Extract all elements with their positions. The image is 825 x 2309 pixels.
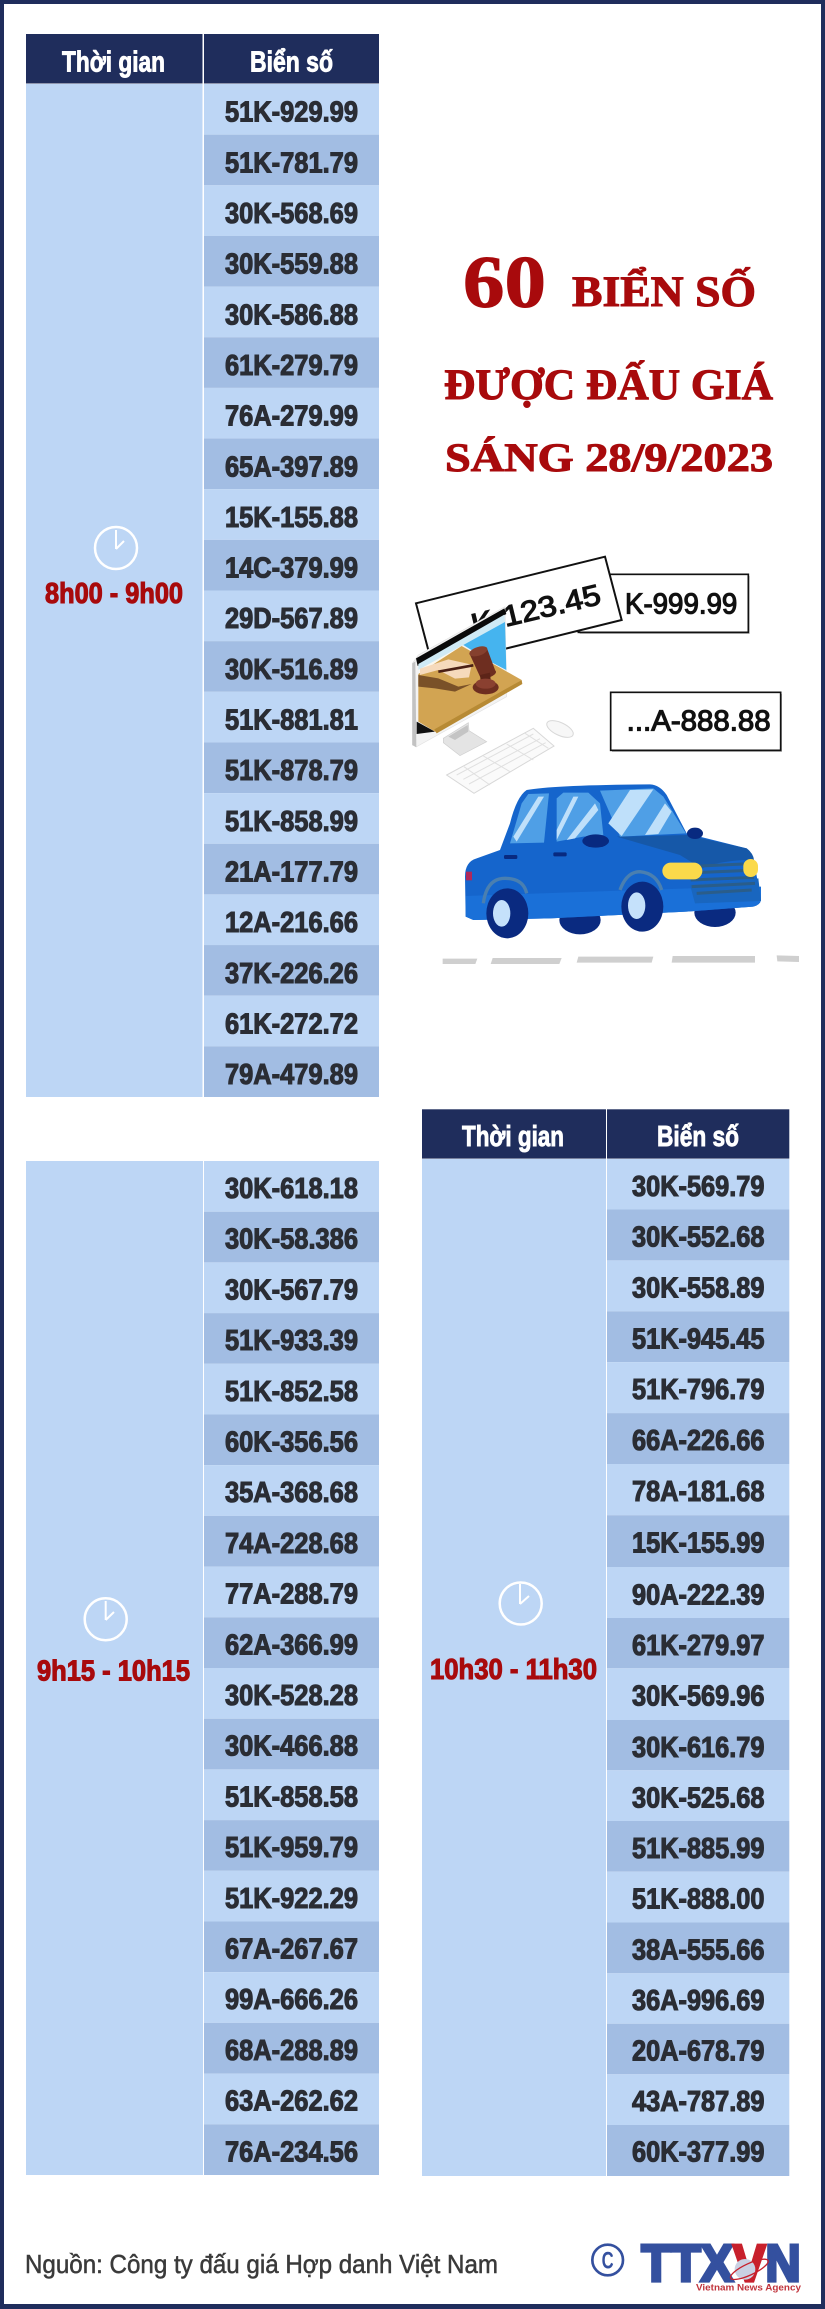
row	[204, 2124, 379, 2175]
row	[204, 1212, 379, 1262]
logo: TTXVN	[592, 2235, 801, 2293]
title	[444, 242, 773, 480]
license plate: A-888.88: ...A-888.88	[627, 706, 771, 738]
row	[607, 1362, 789, 1413]
row: 51K-781.79	[225, 147, 358, 179]
row: 30K-569.79	[632, 1171, 764, 1203]
time cell	[26, 1161, 203, 2175]
panel: table 10h30 - 11h30	[422, 1109, 789, 2176]
icon: keyboard and mouse	[447, 717, 576, 793]
row	[204, 489, 379, 540]
row: 51K-945.45	[632, 1323, 765, 1355]
row: 30K-559.88	[225, 249, 358, 281]
row	[204, 1313, 379, 1364]
row	[607, 2074, 789, 2125]
icon: copyright	[592, 2245, 623, 2275]
row: 30K-618.18	[225, 1173, 358, 1205]
row	[607, 1872, 789, 1922]
row: 51K-922.29	[225, 1883, 358, 1915]
row: 30K-558.89	[632, 1272, 764, 1304]
row: 35A-368.68	[225, 1477, 358, 1509]
row	[607, 1159, 789, 1210]
icon: computer with gavel	[412, 607, 522, 756]
row: 30K-567.79	[225, 1274, 358, 1306]
row	[204, 1871, 379, 1922]
row	[204, 996, 379, 1046]
icon: clock	[500, 1582, 542, 1624]
row: 74A-228.68	[225, 1528, 358, 1560]
row: 51K-858.58	[225, 1781, 358, 1813]
icon: blue car	[465, 784, 761, 938]
table header: time: Thời gian	[462, 1121, 564, 1153]
title line 3: SÁNG 28/9/2023	[445, 435, 773, 480]
road dashes	[443, 955, 799, 964]
title line 1: 60	[463, 242, 546, 324]
row	[204, 540, 379, 590]
row	[607, 1567, 789, 1618]
title line 2: ĐƯỢC ĐẤU GIÁ	[444, 361, 773, 409]
row	[204, 742, 379, 793]
row: 76A-234.56	[225, 2136, 358, 2168]
panel: table 8h00 - 9h00	[26, 34, 379, 1097]
row: 20A-678.79	[632, 2036, 764, 2068]
row	[204, 1161, 379, 1212]
illustration: auction and car	[412, 557, 799, 964]
row	[607, 2024, 789, 2074]
table header: time	[26, 34, 202, 84]
row	[204, 1922, 379, 1972]
panel: table 9h15 - 10h15	[26, 1161, 379, 2175]
row	[607, 1464, 789, 1515]
row	[204, 692, 379, 742]
license plate: K-123.45	[416, 557, 622, 667]
row: 30K-568.69	[225, 198, 358, 230]
icon: clock	[85, 1598, 127, 1640]
table header: plate	[204, 34, 379, 84]
row: 30K-525.68	[632, 1782, 764, 1814]
title line 1	[463, 242, 756, 324]
row: 65A-397.89	[225, 451, 358, 483]
table header: plate: Biển số	[657, 1121, 739, 1153]
row: 61K-272.72	[225, 1008, 358, 1040]
row	[204, 1617, 379, 1668]
row: 15K-155.99	[632, 1528, 764, 1560]
row	[607, 1515, 789, 1567]
row	[204, 844, 379, 894]
row	[607, 1210, 789, 1260]
row: 60K-356.56	[225, 1426, 358, 1458]
row: 51K-885.99	[632, 1833, 764, 1865]
row: 66A-226.66	[632, 1425, 764, 1457]
row	[204, 236, 379, 287]
row: 51K-888.00	[632, 1884, 764, 1916]
row	[607, 1821, 789, 1872]
row: 30K-586.88	[225, 299, 358, 331]
time label: 8h00 - 9h00	[45, 578, 183, 610]
time cell	[26, 84, 202, 1097]
license plate: K-999.99: K-999.99	[625, 588, 737, 620]
row: 63A-262.62	[225, 2086, 358, 2118]
row	[204, 1719, 379, 1769]
row	[607, 1311, 789, 1362]
row	[204, 1820, 379, 1871]
row	[204, 1567, 379, 1617]
row	[607, 1922, 789, 1973]
time cell	[422, 1159, 606, 2176]
row: 51K-858.99	[225, 806, 358, 838]
row	[204, 1262, 379, 1313]
row: 30K-466.88	[225, 1731, 358, 1763]
agency name: Vietnam News Agency	[696, 2283, 801, 2293]
table header: plate	[607, 1109, 789, 1159]
row	[204, 1516, 379, 1567]
row	[204, 590, 379, 641]
row: 36A-996.69	[632, 1985, 764, 2017]
row	[607, 1973, 789, 2024]
row	[607, 1720, 789, 1770]
row: 29D-567.89	[225, 603, 358, 635]
row	[204, 641, 379, 692]
row: 21A-177.79	[225, 856, 358, 888]
row	[204, 894, 379, 945]
row	[204, 135, 379, 185]
row: 61K-279.79	[225, 350, 358, 382]
row: 38A-555.66	[632, 1934, 764, 1966]
row	[204, 1769, 379, 1820]
row	[204, 1414, 379, 1465]
row	[607, 1668, 789, 1720]
row	[607, 1618, 789, 1668]
row	[204, 287, 379, 337]
row: 90A-222.39	[632, 1579, 764, 1611]
icon: copyright: C	[602, 2248, 614, 2275]
source note: Nguồn: Công ty đấu giá Hợp danh Việt Nam	[25, 2249, 498, 2279]
row: 51K-881.81	[225, 704, 358, 736]
row: 15K-155.88	[225, 502, 358, 534]
row	[204, 1668, 379, 1719]
row: 60K-377.99	[632, 2137, 764, 2169]
icon: clock	[95, 527, 137, 569]
row: 67A-267.67	[225, 1934, 358, 1966]
row	[607, 1413, 789, 1464]
row: 30K-58.386	[225, 1224, 358, 1256]
row	[607, 1260, 789, 1311]
wordmark: TTXVN	[641, 2235, 801, 2293]
table header: time: Thời gian	[62, 47, 165, 79]
row: 30K-569.96	[632, 1681, 764, 1713]
row	[204, 945, 379, 996]
row: 14C-379.99	[225, 553, 358, 585]
row: 30K-616.79	[632, 1732, 764, 1764]
row: 30K-552.68	[632, 1222, 764, 1254]
row: 51K-959.79	[225, 1832, 358, 1864]
row: 51K-852.58	[225, 1376, 358, 1408]
table header: time	[422, 1109, 606, 1159]
row	[204, 1465, 379, 1516]
row: 61K-279.97	[632, 1630, 764, 1662]
row	[204, 1046, 379, 1097]
row: 12A-216.66	[225, 907, 358, 939]
row	[204, 1364, 379, 1414]
row: 51K-878.79	[225, 755, 358, 787]
row: 51K-929.99	[225, 97, 358, 129]
row	[204, 337, 379, 388]
row: 51K-933.39	[225, 1325, 358, 1357]
row: 62A-366.99	[225, 1629, 358, 1661]
row	[204, 1972, 379, 2023]
row: 37K-226.26	[225, 958, 358, 990]
row	[607, 2125, 789, 2176]
row	[204, 793, 379, 844]
row: 79A-479.89	[225, 1059, 358, 1091]
row: 43A-787.89	[632, 2086, 764, 2118]
time label: 10h30 - 11h30	[430, 1654, 597, 1686]
row	[204, 388, 379, 439]
row: 68A-288.89	[225, 2035, 358, 2067]
license plate: A-888.88	[611, 692, 782, 752]
row	[204, 2023, 379, 2074]
row: 30K-516.89	[225, 654, 358, 686]
row: 77A-288.79	[225, 1579, 358, 1611]
row: 51K-796.79	[632, 1374, 764, 1406]
time label: 9h15 - 10h15	[37, 1656, 190, 1688]
license plate: K-123.45: K-123.45	[468, 579, 604, 641]
title line 1: BIỂN SỐ	[572, 267, 756, 316]
row: 99A-666.26	[225, 1984, 358, 2016]
icon: globe	[728, 2255, 770, 2283]
license plate: K-999.99	[578, 574, 750, 634]
row	[204, 2074, 379, 2124]
row	[204, 439, 379, 489]
row	[204, 84, 379, 135]
row: 30K-528.28	[225, 1680, 358, 1712]
table header: plate: Biển số	[250, 47, 333, 79]
row: 76A-279.99	[225, 401, 358, 433]
row	[204, 185, 379, 236]
row: 78A-181.68	[632, 1476, 764, 1508]
row	[607, 1770, 789, 1821]
